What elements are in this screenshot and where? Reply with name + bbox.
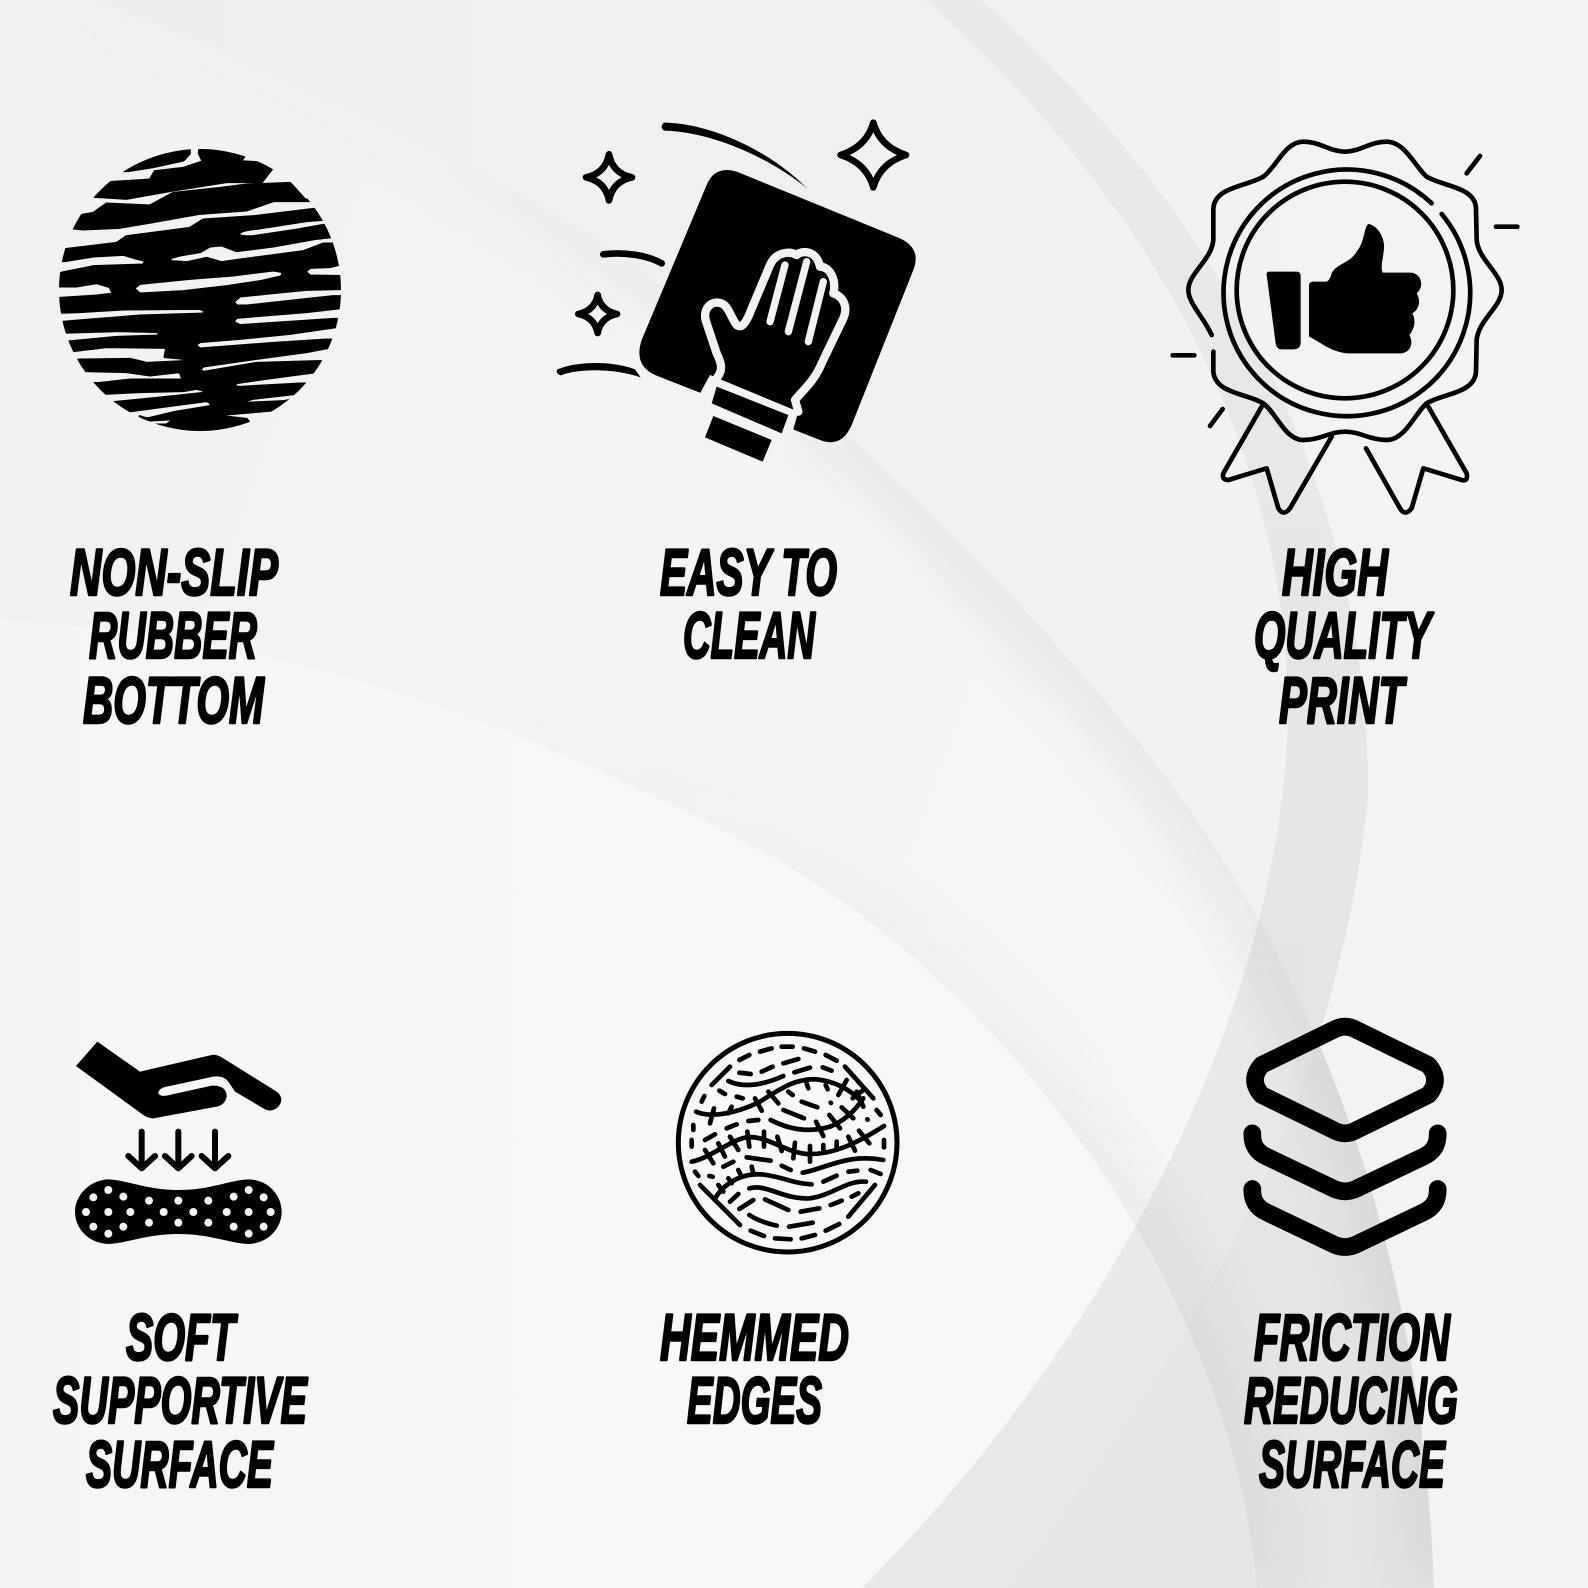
label: hemmed edges [660,1300,849,1437]
label: high quality print [1254,535,1434,737]
label: friction reducing surface: SURFACE [1259,1427,1446,1501]
label: soft supportive surface [53,1300,308,1501]
label: friction reducing surface [1244,1300,1458,1501]
label: soft supportive surface: SUPPORTIVE [53,1363,308,1437]
icon: stacked layers [1252,1027,1438,1247]
label: easy to clean: CLEAN [683,598,816,672]
label: non-slip rubber bottom: NON-SLIP [70,535,279,609]
label: hemmed edges: EDGES [687,1363,822,1437]
label: friction reducing surface: FRICTION [1254,1300,1451,1374]
background: layered curved shapes [862,0,1434,1588]
label: easy to clean [660,535,837,672]
label: non-slip rubber bottom: RUBBER [89,598,257,672]
panel: soft supportive surface [53,1042,308,1501]
label: easy to clean: EASY TO [660,535,837,609]
icon: stitched fabric circle [678,1033,897,1252]
label: high quality print: QUALITY [1254,598,1434,672]
label: non-slip rubber bottom: BOTTOM [83,663,265,737]
label: high quality print: HIGH [1282,535,1389,609]
panel: non-slip rubber bottom [59,149,341,737]
panel: hemmed edges [660,1033,897,1437]
panel: high quality print [1173,142,1517,737]
label: soft supportive surface: SURFACE [86,1427,274,1501]
label: hemmed edges: HEMMED [660,1300,849,1374]
icon: gloved hand wiping with cloth [557,123,916,465]
label: soft supportive surface: SOFT [126,1300,238,1374]
icon: rubber texture disc [59,149,341,431]
label: non-slip rubber bottom [70,535,279,737]
label: friction reducing surface: REDUCING [1244,1363,1458,1437]
icon: rosette badge with thumbs up [1173,142,1517,512]
panel: easy to clean [557,123,916,672]
label: high quality print: PRINT [1279,663,1407,737]
icon: hand pressing foam pad [75,1042,282,1244]
panel: friction reducing surface [1244,1027,1458,1501]
